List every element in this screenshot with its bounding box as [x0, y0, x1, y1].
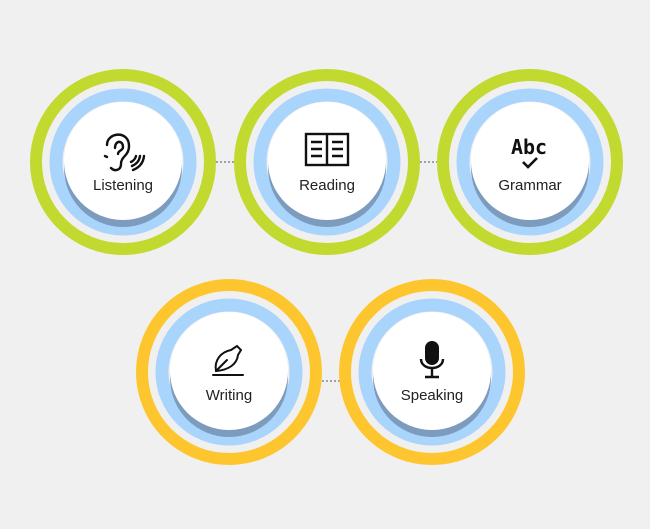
node: Speaking: [345, 285, 519, 459]
icon: ear: [105, 135, 144, 170]
connector: writing-speaking: [322, 380, 340, 382]
label: Speaking: [401, 387, 463, 404]
connector: reading-grammar: [420, 161, 437, 163]
icon: pen nib: [213, 346, 243, 375]
label: Writing: [206, 387, 252, 404]
connector: listening-reading: [216, 161, 234, 163]
node: Listening: [36, 75, 210, 249]
label: Grammar: [498, 177, 562, 194]
node: Grammar: [443, 75, 617, 249]
label: Reading: [299, 177, 355, 194]
icon: book: [306, 134, 348, 165]
icon: Abc check: Abc: [511, 135, 547, 159]
label: Listening: [93, 177, 153, 194]
icon: microphone: [421, 341, 443, 377]
node: Writing: [142, 285, 316, 459]
node: Reading: [240, 75, 414, 249]
